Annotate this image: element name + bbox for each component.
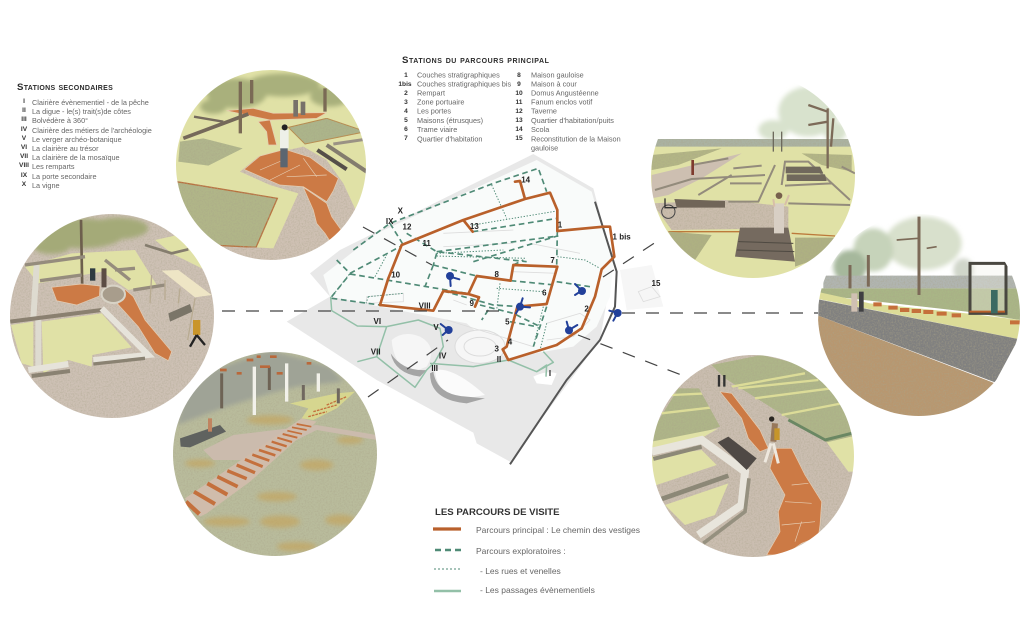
map: station numbers: IX	[386, 217, 394, 226]
map: station numbers: 6	[542, 289, 547, 298]
lawn and planting	[820, 288, 1020, 320]
map: station numbers: 5	[505, 318, 510, 327]
upper left planted bed	[652, 388, 725, 443]
illustration: wooden steps through meadow (bottom left)	[170, 350, 383, 563]
orange flower drifts	[185, 415, 363, 551]
list: secondary stations: III	[21, 116, 27, 123]
birch trunks	[254, 363, 318, 415]
shelter	[162, 270, 212, 297]
list: main stations: Les portes	[417, 106, 451, 116]
map: station numbers: 4	[508, 338, 513, 347]
map: station numbers: 1	[558, 220, 563, 229]
map: station numbers: 11	[422, 239, 431, 248]
map: station numbers: X	[398, 206, 404, 215]
horizon tree line	[655, 139, 851, 147]
list: main stations: Rempart	[417, 88, 445, 98]
list: main stations: 10	[515, 90, 523, 97]
visitors	[210, 385, 338, 432]
pale trees	[758, 87, 847, 142]
list: main stations: 1	[404, 72, 408, 79]
list: secondary stations: La digue - le(s) trait(s)de côtes	[32, 107, 131, 116]
upper right planted terraces	[712, 355, 858, 442]
orange stones	[226, 108, 341, 240]
stone walls	[183, 114, 372, 175]
horizon trees	[823, 276, 1017, 288]
list: secondary stations: Clairière des métiers de l'archéologie	[32, 126, 152, 135]
map: station numbers: 10	[391, 271, 401, 280]
list: main stations: Couches stratigraphiques	[417, 70, 500, 80]
list: main stations: 13	[515, 117, 523, 124]
well	[102, 286, 125, 303]
gravel base	[645, 355, 865, 568]
map: station numbers: III	[431, 364, 438, 373]
list: secondary stations: II	[22, 107, 26, 114]
step ramp	[185, 418, 317, 517]
list: main stations: Reconstitution de la Maison	[531, 134, 621, 144]
list: secondary stations: La porte secondaire	[32, 172, 96, 181]
visitors	[854, 290, 994, 313]
legend heading: LES PARCOURS DE VISITE	[435, 507, 560, 518]
lawn	[651, 146, 855, 278]
lawns	[11, 233, 205, 373]
list: main stations: Fanum enclos votif	[531, 98, 593, 106]
list: main stations	[398, 70, 621, 152]
list: main stations: 9	[517, 81, 521, 88]
gravel diagonal path	[692, 372, 852, 568]
map: exploratory routes	[332, 168, 590, 347]
list: main stations: Zone portuaire	[417, 98, 464, 106]
map: station numbers: 1 bis	[613, 232, 631, 241]
map: station numbers: II	[497, 355, 501, 364]
visitors	[93, 268, 205, 347]
list: main stations: Quartier d'habitation	[417, 134, 482, 144]
orange strips	[873, 304, 1020, 322]
legend item: main route: Parcours principal : Le chemin des vestiges	[476, 525, 640, 535]
stairs	[735, 228, 795, 262]
meadow	[170, 350, 383, 563]
lawn	[176, 70, 366, 248]
dark plots	[786, 167, 827, 181]
list: secondary stations: La clairière au trésor	[32, 144, 99, 153]
wall lines	[655, 158, 855, 205]
list: main stations: 11	[516, 99, 523, 106]
map: station numbers: I	[549, 369, 551, 378]
map: event passages	[331, 297, 553, 387]
autumn leaves	[220, 357, 311, 373]
tree trunk	[81, 220, 82, 293]
list: main stations: 14	[515, 126, 523, 133]
list: main stations: Trame viaire	[417, 125, 457, 134]
illustration: stone path through beds (bottom right)	[645, 355, 865, 568]
list: secondary stations: IX	[21, 172, 28, 179]
map: station numbers: 3	[494, 344, 499, 353]
list: secondary stations: Le verger archéo-botanique	[32, 135, 122, 144]
orange edge	[668, 232, 835, 236]
list: main stations: Maison gauloise	[531, 70, 584, 80]
illustration: stone path with visitor (top left)	[176, 70, 366, 260]
map: station numbers: 14	[521, 175, 531, 184]
list: main stations: Maisons (étrusques)	[417, 116, 483, 125]
list: secondary stations: IV	[21, 126, 28, 133]
bench and wheelchair	[662, 198, 725, 218]
map ground: pale upper site	[323, 160, 613, 358]
list: secondary stations: VI	[21, 144, 27, 151]
yellow plateau	[290, 392, 355, 420]
legend: visit routes	[433, 507, 640, 595]
list: main stations: Domus Angustéenne	[531, 88, 599, 98]
list: main stations: 3	[404, 99, 408, 106]
map: station numbers	[371, 175, 661, 378]
list: secondary stations: X	[22, 181, 27, 188]
visitors	[280, 100, 303, 167]
map: vestiges outlines	[367, 230, 660, 347]
boardwalk	[818, 299, 1018, 382]
tree canopy	[33, 218, 148, 254]
list: main stations: Taverne	[531, 106, 557, 116]
heading: secondary stations: Stations secondaires	[17, 82, 113, 93]
list: main stations: gauloise	[531, 144, 558, 152]
list: main stations: Scola	[531, 125, 550, 134]
map: station numbers: 7	[550, 256, 555, 265]
gravel path	[222, 146, 355, 260]
tree canopies	[833, 217, 973, 283]
heading: main stations: Stations du parcours principal	[402, 55, 550, 66]
legend item: event passages: - Les passages évènementiels	[480, 585, 595, 595]
list: secondary stations: La vigne	[32, 181, 60, 190]
visitors	[693, 160, 789, 233]
list: main stations: Maison à cour	[531, 80, 577, 88]
list: main stations: 15	[515, 135, 523, 142]
list: main stations: 2	[404, 90, 408, 97]
map: station numbers: VII	[371, 348, 381, 357]
list: secondary stations: La clairière de la mosaïque	[32, 153, 120, 162]
panel: site map	[287, 154, 663, 464]
map: boundary road	[510, 202, 617, 464]
visitors	[719, 375, 778, 463]
illustration: excavated quarter (top right)	[651, 86, 855, 278]
legend item: streets and alleys: - Les rues et venelles	[480, 566, 561, 576]
legend item: exploratory routes: Parcours exploratoires :	[476, 546, 566, 556]
list: main stations: 7	[404, 135, 408, 142]
gravel ground	[10, 214, 214, 418]
frame	[970, 263, 1006, 313]
map: station numbers: 15	[652, 279, 661, 288]
list: secondary stations: Les remparts	[32, 162, 75, 171]
legend item: streets and alleys	[434, 566, 561, 576]
list: secondary stations: V	[22, 135, 27, 142]
stone walls	[652, 440, 749, 543]
text block: secondary stations	[17, 82, 152, 190]
map: white mounds	[391, 330, 557, 403]
list: secondary stations: Bolvédère à 360°	[32, 116, 88, 125]
list: main stations: 12	[515, 108, 523, 115]
planted beds	[177, 118, 366, 247]
woodland background	[177, 350, 343, 425]
text block: main stations	[398, 55, 621, 152]
leader lines	[222, 227, 820, 397]
map: station numbers: VIII	[419, 301, 431, 310]
map: main route	[380, 181, 614, 360]
tree trunks	[808, 105, 833, 168]
map: station numbers: 8	[494, 270, 499, 279]
gravel paths	[652, 153, 742, 198]
map ground: grey terrain	[287, 154, 613, 462]
far planted bands	[652, 148, 852, 172]
list: main stations: 4	[404, 108, 408, 115]
sky	[645, 75, 858, 288]
bench	[180, 425, 226, 447]
list: main stations: 8	[517, 72, 521, 79]
list: main stations: 6	[404, 126, 408, 133]
list: secondary stations	[19, 98, 152, 190]
map: station numbers: V	[433, 323, 439, 332]
illustration: well and walls (left)	[10, 214, 214, 418]
list: secondary stations: I	[23, 98, 25, 105]
background trees	[200, 73, 350, 114]
map: viewpoint markers	[441, 272, 622, 335]
orange step slats	[186, 397, 347, 514]
list: secondary stations: VIII	[19, 162, 29, 169]
legend item: exploratory routes	[435, 546, 566, 556]
lawn wedges	[652, 428, 858, 525]
map: station numbers: 2	[584, 304, 589, 313]
orange stones	[720, 392, 822, 555]
list: main stations: Quartier d'habitation/puits	[531, 116, 614, 125]
map: station numbers: 12	[403, 223, 412, 232]
map: station numbers: IV	[439, 351, 447, 360]
ruined walls	[10, 245, 188, 376]
map: station numbers: 9	[469, 299, 474, 308]
exhibit table	[718, 437, 757, 470]
map: streets and alleys	[332, 185, 600, 350]
foreground plants	[668, 232, 835, 267]
exhibit table	[168, 304, 192, 322]
trunks	[850, 217, 919, 295]
sky	[810, 205, 1024, 418]
list: secondary stations: VII	[20, 153, 28, 160]
list: main stations: 1bis	[398, 81, 412, 88]
dry grasses	[817, 316, 995, 418]
tree trunks	[240, 80, 325, 133]
list: secondary stations: Clairière évènementiel - de la pêche	[32, 98, 149, 107]
orange stones	[52, 284, 172, 361]
side gravel path	[203, 425, 377, 460]
yellow walkway	[818, 292, 1020, 339]
list: main stations: Couches stratigraphiques bis	[417, 80, 511, 88]
list: main stations: 5	[404, 117, 408, 124]
map: station numbers: VI	[374, 317, 381, 326]
illustration: boardwalk and frame (right)	[810, 205, 1024, 418]
map: east plot	[620, 265, 663, 310]
terrace edges	[662, 373, 842, 415]
map: station numbers: 13	[470, 222, 479, 231]
